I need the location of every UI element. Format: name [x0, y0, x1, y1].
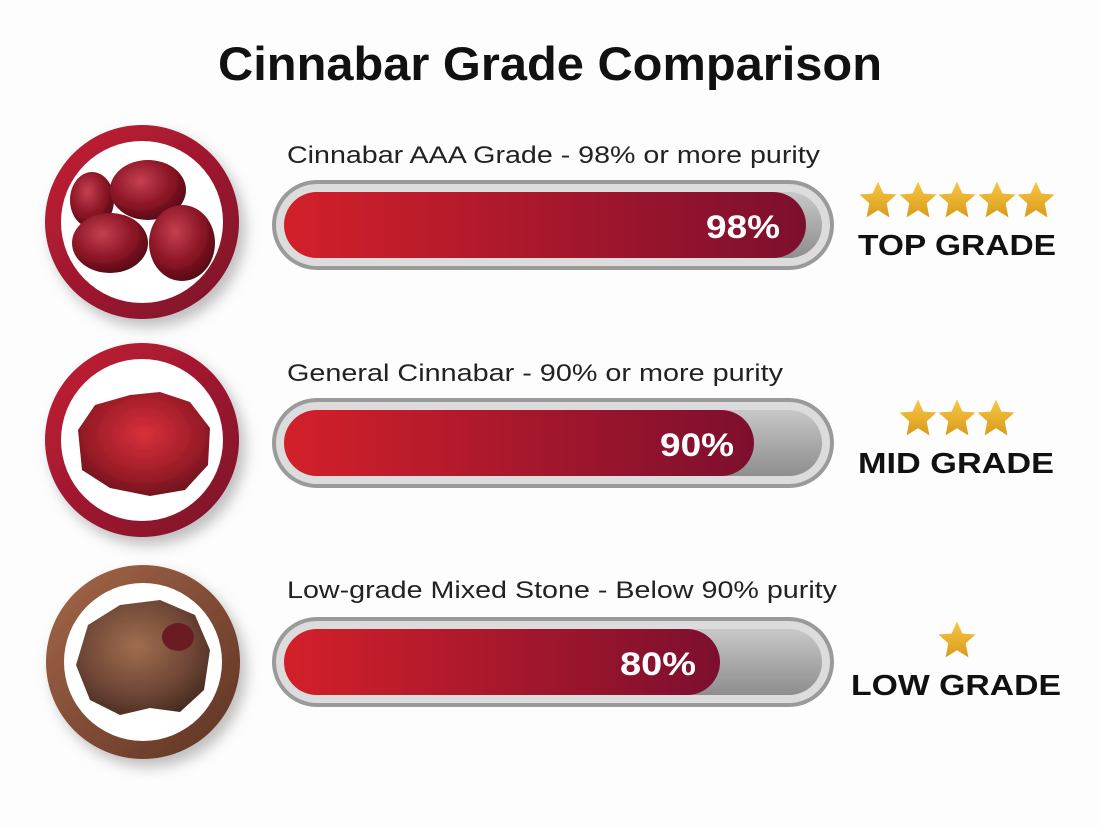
- grade: mid: MID GRADE: [858, 448, 1054, 480]
- bar 80%: [272, 617, 834, 707]
- bar 98%: [272, 180, 834, 270]
- icon: rough cinnabar rock: [45, 343, 239, 537]
- icon: mixed brown stone: [46, 565, 240, 759]
- title: Cinnabar Grade Comparison: [218, 37, 882, 90]
- row: general: [45, 343, 1054, 537]
- grade: top: TOP GRADE: [858, 230, 1056, 262]
- row: AAA grade: [45, 125, 1056, 319]
- stars: 1: [938, 622, 976, 657]
- row: low grade: [46, 565, 1061, 759]
- grade: low: LOW GRADE: [851, 670, 1061, 702]
- bar 80%: 80%: [620, 646, 696, 682]
- label: General Cinnabar - 90% or more purity: [287, 360, 783, 387]
- stars: 3: [900, 400, 1014, 435]
- label: Cinnabar AAA Grade - 98% or more purity: [287, 142, 820, 169]
- icon: polished cinnabar stones: [45, 125, 239, 319]
- stars: 5: [860, 182, 1054, 217]
- label: Low-grade Mixed Stone - Below 90% purity: [287, 577, 837, 604]
- bar 98%: 98%: [706, 209, 780, 245]
- bar 90%: [272, 398, 834, 488]
- bar 90%: 90%: [660, 427, 734, 463]
